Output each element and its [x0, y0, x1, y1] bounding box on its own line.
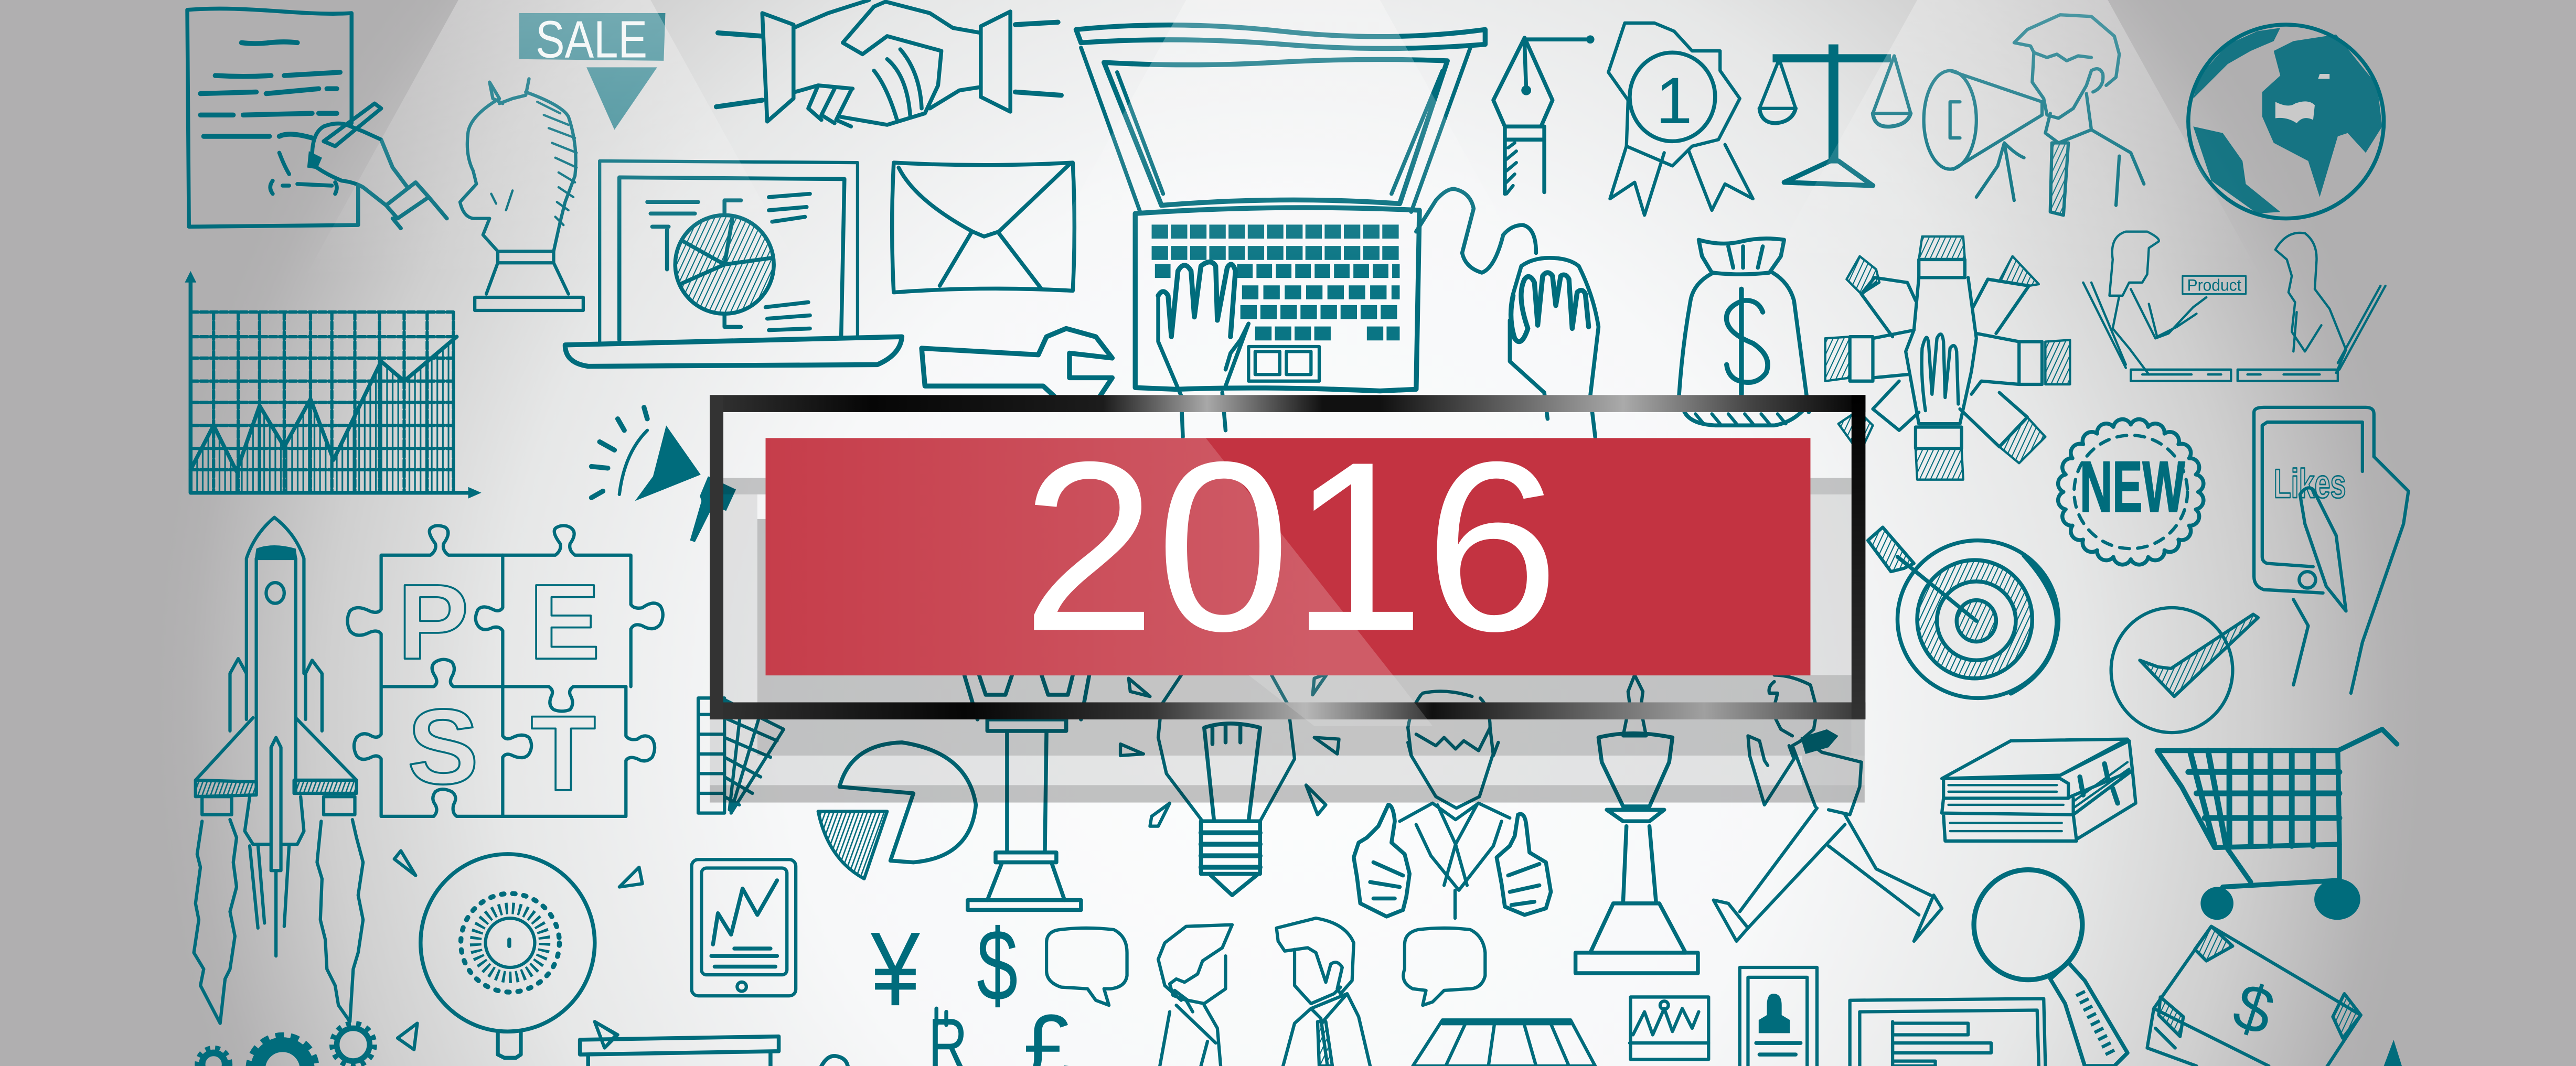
currency symbols	[870, 909, 1073, 1066]
icon: pest puzzle	[347, 525, 663, 816]
icon: product presentation on laptops	[2083, 232, 2386, 381]
icon: fountain pen	[1493, 35, 1595, 194]
currency symbols: $	[977, 909, 1018, 1022]
medal number: 1	[1656, 64, 1692, 137]
banner gloss	[766, 438, 1393, 675]
chart: growth chart	[185, 271, 482, 499]
icon: target with arrow	[1868, 527, 2058, 698]
icon: chess king	[1576, 675, 1698, 973]
icon: wrench	[922, 329, 1112, 407]
year banner	[766, 411, 1810, 681]
icon: mouse and hand	[1416, 189, 1598, 437]
spotlight beams	[304, 0, 2262, 279]
keyboard keys	[1152, 232, 1402, 333]
icon: circular lamp	[394, 851, 643, 1058]
icon: pencil tip	[2384, 1040, 2402, 1066]
icon: presentation screen	[1850, 999, 2045, 1066]
icon: chess rook	[964, 675, 1089, 910]
icon: awning	[1413, 1020, 1595, 1066]
likes label: Likes	[2274, 460, 2346, 507]
icon: board with flag	[580, 1021, 848, 1066]
icon: laptop with pie chart	[565, 161, 902, 367]
product label: Product	[2187, 276, 2241, 294]
icon: dollar bills	[2147, 927, 2361, 1066]
icon: sale tag	[519, 10, 665, 130]
icon: shopping cart	[2157, 729, 2397, 920]
icon: signed document with hand	[187, 8, 447, 228]
icon: envelope	[892, 163, 1074, 293]
icon: id card	[1740, 967, 1817, 1066]
year text: 2016	[1022, 411, 1559, 681]
icon: rocket	[194, 518, 363, 1024]
icon: speech bubble left	[1046, 928, 1127, 1005]
icon: gears	[197, 1024, 375, 1066]
icon: color swatch fan	[698, 698, 784, 813]
icon: large laptop	[1076, 25, 1485, 437]
icon: pie chart	[818, 742, 976, 879]
icon: running businessman	[1714, 675, 1942, 941]
icon: two businessmen	[1158, 918, 1370, 1066]
icon: light bulb	[1120, 673, 1339, 895]
icon: stack of books	[1942, 739, 2136, 841]
puzzle letters: T	[531, 694, 596, 813]
icon: globe	[2188, 25, 2384, 219]
puzzle letters: E	[529, 563, 600, 682]
frame shadow panels	[710, 478, 1865, 803]
icon: check mark circle	[2111, 608, 2258, 733]
puzzle letters	[398, 563, 600, 813]
icon: handshake	[717, 0, 1061, 126]
icon: balance scale	[1759, 45, 1911, 186]
icon: chess knight	[460, 79, 583, 310]
glare streak	[1248, 675, 1433, 726]
currency symbols: ¥	[870, 911, 920, 1028]
black frame	[710, 395, 1865, 719]
dollar sign on bill: $	[2225, 968, 2283, 1050]
icon: small megaphone	[592, 407, 736, 542]
icon: magnifying glass	[1974, 870, 2128, 1066]
icon: man with megaphone	[1924, 15, 2144, 215]
sale label: SALE	[536, 10, 647, 69]
puzzle letters: P	[398, 563, 469, 682]
icon: team hands together	[1825, 236, 2070, 480]
icon: first place medal	[1608, 23, 1753, 215]
icon: speech bubble right	[1403, 928, 1485, 1005]
icon: tablet with chart	[692, 859, 796, 996]
icon: money bag	[1679, 239, 1809, 425]
new label: NEW	[2080, 447, 2185, 527]
icon: new badge	[2058, 419, 2204, 565]
icon: phone with likes	[2254, 407, 2409, 693]
puzzle letters: S	[408, 687, 479, 806]
icon: picture frame	[1630, 997, 1708, 1059]
rupee style stroke	[936, 1008, 946, 1025]
icon: businessman thumbs up	[1354, 691, 1551, 918]
